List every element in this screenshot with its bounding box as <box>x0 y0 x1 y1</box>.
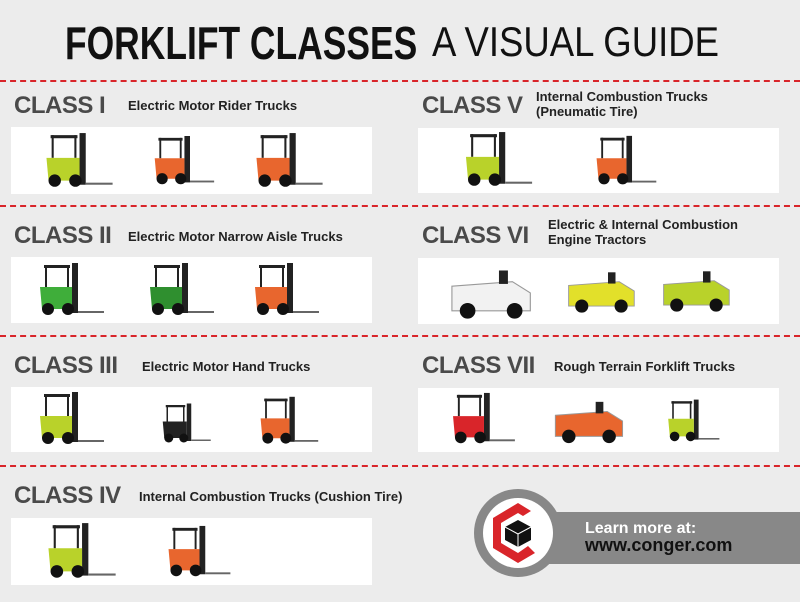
subtitle: class I: Electric Motor Rider Trucks <box>128 98 297 113</box>
subtitle: class V: Internal Combustion Trucks <box>536 89 708 104</box>
heading: class III: CLASS III <box>14 352 118 379</box>
panel: class V images <box>418 128 779 193</box>
title <box>65 17 719 69</box>
title: A VISUAL GUIDE <box>432 18 719 65</box>
panel: class VI images <box>418 258 779 324</box>
subtitle: class VII: Rough Terrain Forklift Trucks <box>554 359 735 374</box>
subtitle: class VI <box>548 217 738 247</box>
subtitle: class VI: Engine Tractors <box>548 232 646 247</box>
heading: class VI: CLASS VI <box>422 222 529 249</box>
subtitle: class V: (Pneumatic Tire) <box>536 104 638 119</box>
subtitle: class III: Electric Motor Hand Trucks <box>142 359 310 374</box>
text: learn more: Learn more at: <box>585 520 696 537</box>
heading: class VII: CLASS VII <box>422 352 535 379</box>
heading: class V: CLASS V <box>422 92 523 119</box>
subtitle: class V <box>536 89 708 119</box>
panel: class III images <box>11 387 372 452</box>
heading: class IV: CLASS IV <box>14 482 121 509</box>
title: FORKLIFT CLASSES <box>65 17 417 69</box>
heading: class II: CLASS II <box>14 222 111 249</box>
icon: conger logo <box>474 489 557 577</box>
callout: learn more <box>474 489 800 577</box>
panel: class II images <box>11 257 372 323</box>
panel: class VII images <box>418 388 779 452</box>
subtitle: class IV: Internal Combustion Trucks (Cushion Tire) <box>139 489 402 504</box>
text: learn more: www.conger.com <box>585 535 732 555</box>
panel: class IV images <box>11 518 372 585</box>
text: learn more <box>585 520 732 555</box>
grey bar <box>545 512 800 564</box>
panel: class I images <box>11 127 372 194</box>
subtitle: class VI: Electric & Internal Combustion <box>548 217 738 232</box>
heading: class I: CLASS I <box>14 92 105 119</box>
subtitle: class II: Electric Motor Narrow Aisle Trucks <box>128 229 343 244</box>
